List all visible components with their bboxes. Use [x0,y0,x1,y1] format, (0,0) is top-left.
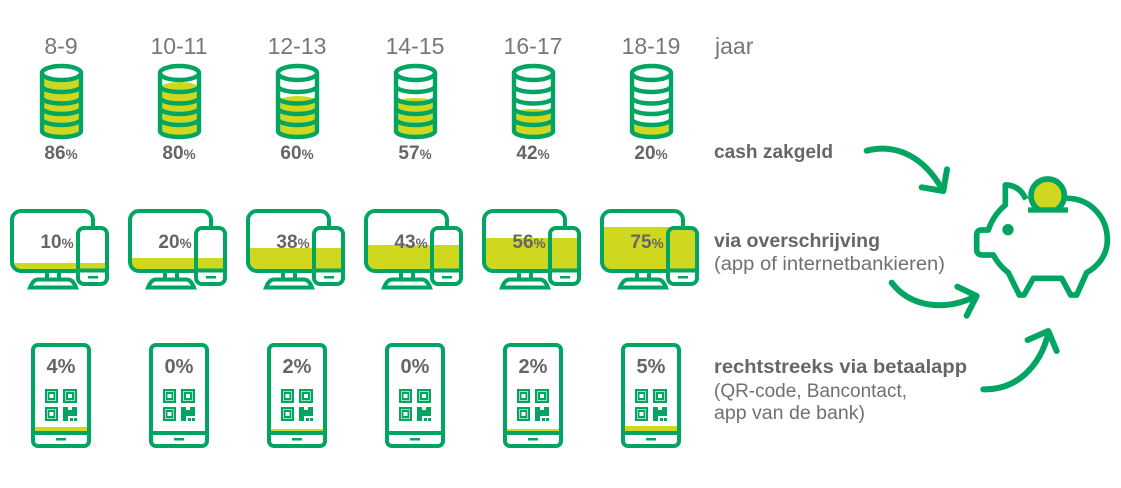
devices 14-15: 43%: 43% [394,232,428,253]
arrow: payment app to piggy bank [983,331,1057,389]
coin stack 8-9: 86% [42,66,81,164]
devices 10-11: 20% [130,211,225,288]
phone QR 14-15: 0% [387,345,443,446]
coin stack 12-13: 60%: 60% [280,143,314,164]
coin stack 12-13: 60% [278,66,317,164]
coin stack 14-15: 57%: 57% [398,143,432,164]
age header row: 14-15 [386,33,444,59]
age header row: 12-13 [268,33,326,59]
label: cash zakgeld: cash zakgeld [714,142,833,163]
coin stack 18-19: 20%: 20% [634,143,668,164]
devices 8-9: 10% [12,211,107,288]
arrow: cash to piggy bank [867,149,947,191]
age header row: 16-17 [504,33,562,59]
devices 12-13: 38% [248,211,343,288]
label: rechtstreeks via betaalapp: (QR-code, Bancontact, [714,381,907,402]
devices 16-17: 56%: 56% [512,232,546,253]
coin stack 8-9: 86%: 86% [44,143,78,164]
phone QR 16-17: 2%: 2% [519,356,548,378]
coin stack 16-17: 42% [514,66,553,164]
devices 12-13: 38%: 38% [276,232,310,253]
label: via overschrijving: via overschrijving [714,231,880,252]
phone QR 10-11: 0% [151,345,207,446]
phone QR 18-19: 5%: 5% [637,356,666,378]
coin stack 10-11: 80% [160,66,199,164]
age header row: 18-19 [622,33,680,59]
phone QR 12-13: 2% [269,345,325,446]
phone QR 14-15: 0%: 0% [401,356,430,378]
phone QR 10-11: 0%: 0% [165,356,194,378]
label: rechtstreeks via betaalapp: rechtstreeks via betaalapp [714,357,967,378]
label: rechtstreeks via betaalapp [714,357,967,424]
phone QR 18-19: 5% [623,345,679,446]
label: rechtstreeks via betaalapp: app van de bank) [714,403,865,424]
phone QR 12-13: 2%: 2% [283,356,312,378]
devices 10-11: 20%: 20% [158,232,192,253]
devices 18-19: 75% [602,211,697,288]
label: via overschrijving: (app of internetbankieren) [714,254,945,275]
phone QR 8-9: 4% [33,345,89,446]
coin stack 18-19: 20% [632,66,671,164]
arrow: transfer to piggy bank [892,283,977,316]
coin stack 16-17: 42%: 42% [516,143,550,164]
icon: piggy bank with coin [977,179,1107,295]
age header row [44,33,754,59]
age header row: jaar [714,33,754,59]
devices 18-19: 75%: 75% [630,232,664,253]
phone QR 8-9: 4%: 4% [47,356,76,378]
coin stack 10-11: 80%: 80% [162,143,196,164]
age header row: 10-11 [150,33,208,59]
devices 8-9: 10%: 10% [40,232,74,253]
phone QR 16-17: 2% [505,345,561,446]
devices 14-15: 43% [366,211,461,288]
coin stack 14-15: 57% [396,66,435,164]
devices 16-17: 56% [484,211,579,288]
age header row: 8-9 [44,33,78,59]
label: via overschrijving [714,231,945,275]
